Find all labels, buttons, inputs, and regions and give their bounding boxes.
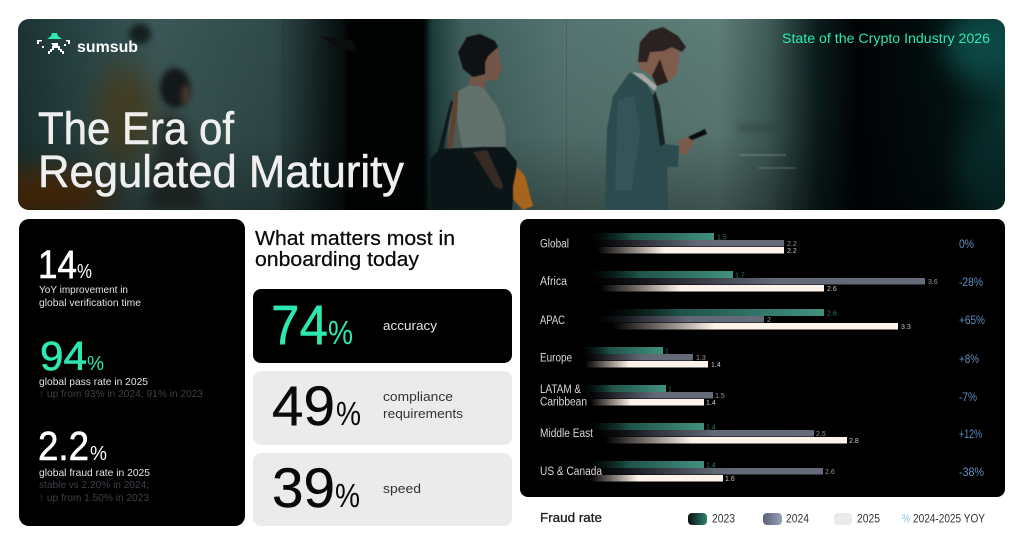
stat: verification time: 14 [38, 243, 77, 287]
row: Africa: 3.6 [928, 279, 938, 286]
row: Europe: Europe [540, 352, 572, 364]
row: Global: Global [540, 238, 569, 250]
stat: verification time: global verification time [39, 297, 141, 309]
card: speed: % [335, 477, 360, 514]
row: US & Canada: 1.4 [706, 462, 716, 470]
row: LATAM & Caribbean [540, 384, 977, 408]
row: US & Canada: US & Canada [540, 466, 603, 478]
row: APAC: 3.3 [901, 324, 911, 331]
card: compliance requirements: compliance [383, 389, 453, 404]
icon: sumsub pixel face [37, 33, 70, 54]
stat: pass rate: global pass rate in 2025 [39, 376, 148, 388]
logo: sumsub [37, 33, 138, 56]
row: Global: 1.5 [717, 234, 727, 242]
card: speed: speed [383, 481, 421, 496]
stat: fraud rate: global fraud rate in 2025 [39, 467, 150, 479]
row: APAC: +65% [959, 313, 985, 327]
row: Europe: 1.4 [711, 362, 721, 369]
row: LATAM & Caribbean: -7% [959, 390, 977, 404]
stat: fraud rate: 2.2 [38, 423, 89, 469]
report label: State of the Crypto Industry 2026 [782, 31, 990, 46]
row: US & Canada: -38% [959, 465, 984, 479]
card: accuracy: 74 [271, 293, 328, 356]
title [38, 103, 404, 197]
stat: fraud rate: ↑ up from 1.50% in 2023 [39, 492, 149, 504]
legend: Fraud rate [540, 510, 602, 525]
card: compliance requirements: requirements [383, 406, 464, 421]
title: The Era of [38, 103, 234, 154]
stat: verification time [38, 243, 141, 309]
stat: verification time: YoY improvement in [39, 284, 128, 296]
row: Middle East: 2.8 [849, 438, 859, 445]
legend: % [902, 514, 910, 526]
card: compliance requirements: % [336, 395, 361, 432]
row: APAC: 2 [767, 317, 771, 324]
logo: sumsub: sumsub [77, 39, 138, 56]
card: accuracy: % [328, 314, 353, 351]
row: Africa: Africa [540, 276, 568, 288]
legend: 2024 [786, 514, 810, 526]
panel: key stats [19, 219, 245, 526]
row: LATAM & Caribbean: 1.5 [715, 393, 725, 400]
card: compliance requirements [253, 371, 512, 445]
heading: what matters most: What matters most in [255, 228, 455, 250]
stat: fraud rate [38, 423, 150, 504]
legend: 2025 [857, 514, 880, 526]
title: Regulated Maturity [38, 146, 404, 197]
row: Middle East [540, 423, 982, 445]
row: APAC: 2.6 [827, 310, 837, 318]
stat: pass rate: ↑ up from 93% in 2024; 91% in 2023 [39, 388, 203, 400]
man figure [605, 27, 707, 210]
legend: 2024-2025 YOY [913, 514, 985, 526]
row: Africa: -28% [959, 275, 983, 289]
row: US & Canada: 1.6 [725, 476, 735, 483]
row: Global: 2.2 [787, 248, 797, 255]
stat: pass rate [39, 333, 203, 400]
row: Africa [540, 271, 983, 293]
row: US & Canada [540, 461, 984, 483]
card: compliance requirements: 49 [272, 374, 335, 437]
row: Africa: 2.6 [827, 286, 837, 293]
legend: 2023 [712, 514, 735, 526]
row: Middle East: Middle East [540, 428, 594, 440]
row: Europe: 1 [665, 348, 669, 356]
stat: fraud rate: stable vs 2.20% in 2024; [39, 479, 149, 491]
row: Global: 0% [959, 237, 974, 251]
row: Europe [540, 347, 979, 369]
row: LATAM & Caribbean: Caribbean [540, 396, 587, 408]
card: speed [253, 453, 512, 526]
row: APAC [540, 309, 985, 331]
row: Middle East: 2.5 [816, 431, 826, 438]
heading: what matters most [255, 228, 455, 271]
row: Global [540, 233, 974, 255]
row: LATAM & Caribbean: 1.4 [706, 400, 716, 407]
row: Global: 2.2 [787, 241, 797, 248]
card: accuracy: accuracy [383, 318, 438, 333]
row: APAC: APAC [540, 315, 565, 327]
stat: pass rate: 94 [40, 333, 87, 379]
row: Middle East: 1.4 [706, 424, 716, 432]
stat: fraud rate: % [90, 443, 107, 465]
row: US & Canada: 2.6 [825, 469, 835, 476]
row: Africa: 1.7 [735, 272, 745, 280]
legend [540, 510, 985, 526]
card: accuracy [253, 289, 512, 363]
hero banner [18, 19, 1005, 210]
panel: fraud rate chart [520, 219, 1005, 497]
row: LATAM & Caribbean: 1 [668, 386, 672, 394]
woman figure [430, 34, 533, 210]
stat: verification time: % [77, 261, 92, 283]
row: Europe: 1.3 [696, 355, 706, 362]
card: speed: 39 [272, 456, 335, 519]
row: Europe: +8% [959, 352, 979, 366]
row: LATAM & Caribbean: LATAM & [540, 384, 581, 396]
stat: pass rate: % [87, 353, 104, 375]
heading: what matters most: onboarding today [255, 249, 419, 271]
row: Middle East: +12% [959, 427, 982, 441]
